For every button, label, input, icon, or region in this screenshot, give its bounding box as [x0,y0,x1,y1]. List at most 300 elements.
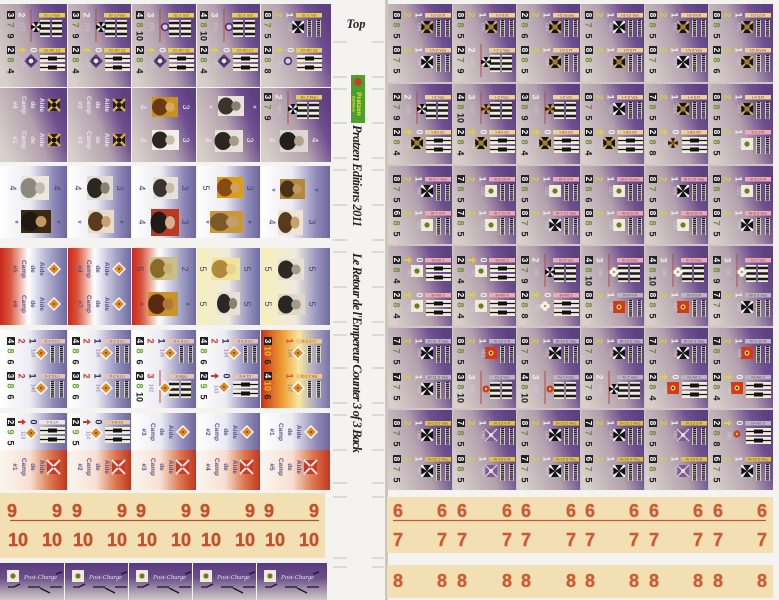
counter 061: 061 [726,432,732,440]
counter 039 [584,254,643,287]
counter 064: 5 [520,441,530,447]
post-charge 1 [0,563,64,600]
counter 054: 2 [403,338,413,344]
counter 040 [520,254,579,287]
counter 046: IV-9 4 R [623,293,637,298]
counter 014: 014 [672,105,678,113]
counter 135: 2 [146,338,156,344]
leader values blue rows: * [10,220,20,224]
counter 042: 042 [406,269,412,277]
row of 9 markers: 9 [181,501,191,521]
counter 142: X-sign [175,374,187,379]
counter 034: 8 [584,220,594,226]
leader values purple row: 3 [181,104,191,110]
portrait 3b col5 [278,210,303,235]
panel: right tan 8 strip: 8 [713,571,723,591]
counter 139: 8 [6,348,16,354]
counter 075: 4 [135,13,144,18]
counter 077 [6,9,65,42]
counter 078: 0 [29,47,39,53]
counter 031: 2 [403,210,413,216]
counter 054: 7 [392,348,402,354]
counter 024 [712,128,771,156]
counter 029 [456,175,515,203]
counter 078 [6,46,65,74]
counter 049 [712,337,771,365]
counter 011: 5 [648,68,658,74]
aide de camp #2 purple: Camp [85,131,92,149]
counter 022: I-Art 04 [623,130,637,135]
counter 078: 2 [6,48,15,53]
counter 022: 0 [607,129,617,135]
counter 032: III-7 21 R [494,211,510,216]
Pratzen Editions logo: Pratzen [355,92,362,116]
counter 137: 3 [274,373,284,379]
counter 048: 2 [723,292,733,298]
counter 042: 4 [392,278,402,284]
post-charge 1: Post-Charge [23,574,57,581]
leader values purple row: 3 [245,137,255,143]
row of 10 markers: 10 [265,530,285,550]
counter 009: 2 [531,47,541,53]
counter 053: 8 [456,339,465,344]
counter 052: 7 [520,348,530,354]
counter 076: 076 [84,23,90,31]
counter 005: 2 [467,12,477,18]
counter 017: 10 [456,113,466,123]
row of 9 markers: 9 [52,501,62,521]
row of 6 markers: 6 [649,501,659,521]
counter 071: 8 [648,466,658,472]
counter 017: 8 [456,104,466,110]
counter 135 [135,337,194,365]
counter 035: 8 [648,220,658,226]
counter 066: 066 [416,431,422,439]
counter 036: III-8 3 Vee [749,211,768,216]
counter 056 [456,371,515,404]
panel: right tan 8 strip [387,565,773,598]
counter 136: 3 [274,338,284,344]
counter 035: 1 [670,210,680,216]
counter 030 [392,175,451,203]
counter 033 [520,209,579,237]
counter 137 [263,372,322,400]
leader values blue rows: 2 [180,266,190,272]
portrait 3b col3 [150,209,179,236]
counter 061: 0 [735,420,745,426]
Pratzen Editions logo [351,75,365,123]
counter 028: 2 [531,176,541,182]
counter 028: III-6 9 R [559,177,573,182]
counter 060: 8 [712,384,722,390]
row of 6 markers: 6 [693,501,703,521]
row of 10 markers: 10 [171,530,191,550]
aide de camp #4 purple [11,96,60,114]
panel: right tan 8 strip: 8 [502,571,512,591]
counter 068: IV-15 2 R [494,457,510,462]
counter 080: 0 [158,47,168,53]
aide de camp #4 red [76,260,126,278]
aide de camp #4 red: Aide [103,262,110,276]
counter 055: 1 [414,374,424,380]
counter 006: 006 [416,23,422,31]
counter 071 [648,455,707,483]
counter 017 [456,91,515,124]
counter 143: 0 [222,373,232,379]
portrait 3a col2 [87,176,113,200]
counter 064: 7 [520,430,530,436]
counter 140: 3 [6,374,15,379]
aide de camp #1 purple: de [29,136,36,144]
counter 033: 033 [544,221,550,229]
counter 062: 8 [648,430,658,436]
aide de camp #3 union: Camp [149,458,156,476]
counter 043: 8 [392,302,402,308]
counter 003: I-5-13 Vee [621,13,640,18]
counter 016: I-2 Vol [560,95,572,100]
panel: right sheet counters rows 5-6 [392,337,771,404]
counter 053: 5 [456,359,466,365]
counter 039: 3 [595,257,605,263]
counter 139: 139 [30,349,36,357]
counter 038: 3 [659,257,669,263]
counter 067: 8 [392,457,401,462]
counter 135: 135 [158,349,164,357]
counter 021 [520,128,579,156]
aide de camp #5 red: Camp [20,260,27,278]
leader values blue rows: 4 [137,185,147,191]
leader values purple row: 4 [310,137,320,143]
counter 058: 2 [595,374,605,380]
counter 139: 1 [28,338,38,344]
counter 068: 2 [467,456,477,462]
counter 113: 5 [6,440,16,446]
counter 062: IV-13 3 R [686,421,702,426]
counter 062 [648,419,707,447]
counter 072: 2 [723,456,733,462]
counter 070: 6 [584,457,593,462]
counter 006 [392,11,451,39]
counter 028: 8 [520,177,529,182]
counter 003: 8 [584,13,593,18]
counter 143: 9 [199,383,209,389]
counter 044: 0 [479,292,489,298]
counter 057: IV-1 Flan [558,375,574,380]
counter 083: 3 [263,95,272,100]
counter 049: 5 [712,359,722,365]
counter 052: 5 [520,359,530,365]
counter 024: 8 [712,130,721,135]
counter 140: 1 [28,373,38,379]
counter 066 [392,419,451,447]
row of 7 markers: 7 [437,530,447,550]
counter 143: 2 [199,374,208,379]
counter 037: 037 [724,268,730,276]
counter 014: 8 [648,104,658,110]
post-charge 4 [193,563,256,600]
counter 067: 2 [403,456,413,462]
leader values blue rows: 5 [263,266,273,272]
counter 060: 4 [712,395,722,401]
portrait 3a col1 [20,176,49,200]
counter 079: Gr-Art 15 [109,48,126,53]
post-charge 2: Post-Charge [88,574,122,581]
counter 114: 0 [94,419,104,425]
aide de camp #6 red: #6 [11,300,18,308]
portrait 4a col5 [278,259,304,280]
leader values blue rows: 4 [8,185,18,191]
counter 048: 7 [712,302,722,308]
counter 078: Gr-Art 14 [44,48,61,53]
counter 073: 5 [263,33,273,39]
counter 015 [584,93,643,121]
aide de camp #1 purple: #1 [11,136,18,144]
counter 023: 2 [648,130,657,135]
counter 082: Gr-Art 18 [301,48,318,53]
counter 049: 1 [734,338,744,344]
counter 020: 4 [456,150,466,156]
counter 079 [71,46,130,74]
counter 057: 4 [520,375,529,380]
counter 056: 3 [467,374,477,380]
panel: right tan 8 strip: 8 [629,571,639,591]
counter 049: 8 [712,348,722,354]
aide de camp #5 red [11,260,61,278]
counter 057 [520,371,579,404]
counter 041: 2 [456,258,465,263]
counter 055: 055 [416,385,422,393]
counter 029: 1 [478,176,488,182]
counter 072: 6 [712,457,721,462]
row of 10 markers: 10 [201,530,221,550]
counter 030: 5 [392,197,402,203]
counter 075: Sc-1 Vol [174,13,189,18]
counter 026: 8 [648,177,657,182]
counter 002: I-5-24 R [687,13,701,18]
counter 001: 1 [734,12,744,18]
aide de camp #2 purple: de [94,136,101,144]
aide de camp #2 blue: Camp [213,423,220,441]
counter 002: 1 [670,12,680,18]
counter 015: 7 [584,104,594,110]
counter 066: 5 [392,441,402,447]
aide de camp #6 red: de [29,300,36,308]
counter 065: 2 [467,420,477,426]
counter 007: 2 [403,47,413,53]
counter 138: X-2 3 Ln [109,339,125,344]
aide de camp #4 union: de [222,463,229,471]
counter 025: 5 [712,197,722,203]
aide de camp #7 red [76,295,126,313]
leader values blue rows: 3 [307,219,317,225]
counter 020: 8 [456,139,466,145]
counter 052: 2 [531,338,541,344]
row of 6 markers: 6 [757,501,767,521]
counter 059: 2 [648,375,657,380]
panel: right tan 8 strip: 8 [393,571,403,591]
aide de camp #1 blue: #1 [268,428,275,436]
counter 043: 2 [392,293,401,298]
counter 003 [584,11,643,39]
aide de camp #2 blue [204,423,254,441]
counter 004: 2 [520,13,529,18]
counter 136: 6 [263,359,273,365]
counter 001: 8 [712,13,721,18]
leader values purple row: 3 [181,137,191,143]
counter 019: I-Art 01 [431,130,445,135]
counter 060: IV-Art 2 [751,375,765,380]
aide de camp #5 union: Camp [277,458,284,476]
counter 069: 7 [520,457,529,462]
counter 051 [584,337,643,365]
counter 007: 007 [416,58,422,66]
row of 9 markers: 9 [309,501,319,521]
counter 013: 1 [734,94,744,100]
counter 010: I-5-3 R [624,48,636,53]
row of 7 markers: 7 [757,530,767,550]
leader values blue rows: 3 [180,185,190,191]
counter 037: 8 [712,267,722,273]
counter 076: 7 [71,22,81,28]
counter 077: 2 [17,12,27,18]
aide de camp #1 blue: Camp [277,423,284,441]
counter 065: 1 [478,420,488,426]
counter 034: 5 [584,231,594,237]
counter 058: 7 [584,384,594,390]
aide de camp #4 red: #4 [76,265,83,273]
counter 026: 5 [648,197,658,203]
counter 070: 7 [584,466,594,472]
counter 051: 2 [595,338,605,344]
counter 005: 005 [480,23,486,31]
counter 008: 2 [467,47,477,53]
counter 135: 4 [135,339,144,344]
counter 042: 8 [392,267,402,273]
counter 137: 4 [263,374,272,379]
counter 019: 0 [415,129,425,135]
counter 138: 8 [71,348,81,354]
counter 073 [263,11,322,39]
leader values blue rows: 5 [307,266,317,272]
counter 031: 6 [392,211,401,216]
counter 030: III-5 7 Vee [429,177,448,182]
counter 046: 8 [584,302,594,308]
aide de camp #4 union: #4 [204,463,211,471]
counter 010: 8 [584,57,594,63]
row of 9 markers: 9 [117,501,127,521]
counter 032: 5 [456,231,466,237]
counter 082: 8 [263,68,273,74]
counter 073: 1 [285,12,295,18]
counter 013: 013 [736,105,742,113]
aide de camp #3 union: de [158,463,165,471]
counter 072: 5 [712,477,722,483]
counter 078: 8 [6,57,16,63]
portrait 3b col2 [88,210,114,233]
counter 074: 3 [210,12,220,18]
aide de camp #4 union: Camp [213,458,220,476]
counter 048: 048 [736,303,742,311]
counter 040: 7 [520,267,530,273]
counter 142 [135,370,194,403]
counter 140 [6,372,65,400]
counter 046: 1 [606,292,616,298]
counter 134: 4 [199,339,208,344]
counter 034: 2 [595,210,605,216]
aide de camp #3 blue [140,423,190,441]
counter 137: 137 [286,384,292,392]
counter 002: 5 [648,33,658,39]
counter 042: 0 [415,257,425,263]
counter 040: 3 [520,258,529,263]
counter 009: 5 [520,68,530,74]
leader values blue rows: 4 [52,185,62,191]
counter 080: 8 [135,57,145,63]
leader values blue rows: 3 [180,219,190,225]
aide de camp #4 union: Aide [231,460,238,474]
row of 9 markers: 9 [245,501,255,521]
leader values blue rows: 4 [267,219,277,225]
row of 9 markers [7,501,319,521]
counter 049: 2 [723,338,733,344]
counter 035: 2 [659,210,669,216]
counter 080: 4 [135,68,145,74]
panel: right tan 8 strip: 8 [566,571,576,591]
counter 140: X-2 5 Ln [44,374,60,379]
aide de camp #7 red: #7 [76,300,83,308]
counter 006: 5 [392,33,402,39]
counter 059: 4 [648,395,658,401]
counter 001: I-5 12 R [751,13,765,18]
counter 024: 8 [712,139,722,145]
aide de camp #5 red: Aide [38,262,45,276]
counter 070: IV-15 4 Rec [620,457,640,462]
counter 050: 7 [648,339,657,344]
counter 079: 4 [71,68,81,74]
counter 025: 8 [712,186,722,192]
counter 067: 067 [416,467,422,475]
counter 023: 8 [648,150,658,156]
counter 014 [648,93,707,121]
counter 063: 2 [595,420,605,426]
counter 002: 8 [648,13,657,18]
counter 047: 8 [648,302,658,308]
counter 041 [456,256,515,284]
counter 030: 030 [416,187,422,195]
counter 039: 8 [584,267,594,273]
counter 024: 024 [736,140,742,148]
counter 023: 8 [648,139,658,145]
counter 059: 059 [662,386,668,394]
counter 014: 2 [659,94,669,100]
counter 006: 8 [392,22,402,28]
panel: right tan 8 strip: 8 [585,571,595,591]
counter 081: Gr-Art 17 [237,48,254,53]
counter 066: 1 [414,420,424,426]
counter 050: 5 [648,359,658,365]
counter 037: III-1 Vol [751,258,765,263]
counter 139 [6,337,65,365]
counter 080 [135,46,194,74]
aide de camp #7 red: Aide [103,297,110,311]
counter 061: 8 [712,441,722,447]
counter 114: Y-A 15 [111,420,124,425]
portrait 2a col4 [218,96,244,116]
counter 058: 3 [584,375,593,380]
counter 007: 8 [392,48,401,53]
row of 7 markers: 7 [393,530,403,550]
aide de camp #5 red: de [29,265,36,273]
